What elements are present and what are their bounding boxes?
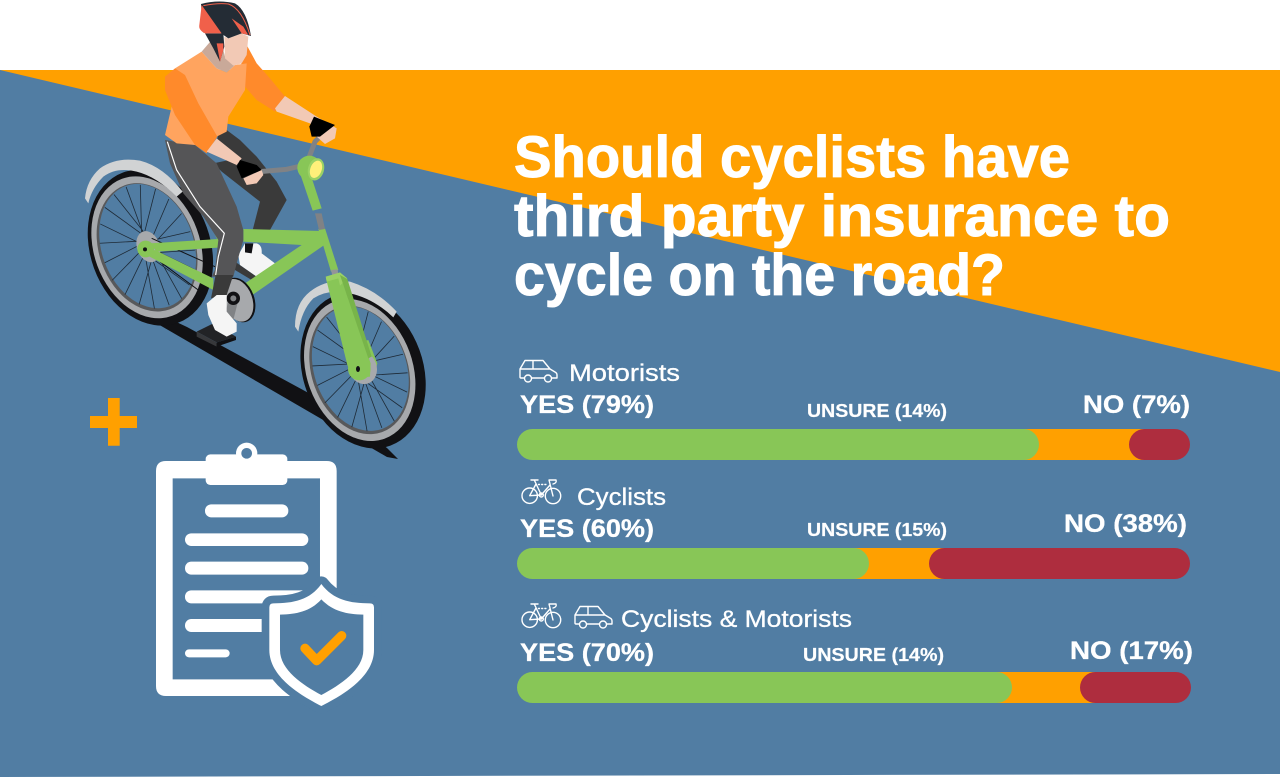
head tube xyxy=(318,228,338,272)
helmet red stripe xyxy=(203,4,250,35)
handlebars xyxy=(260,137,320,172)
near forearm xyxy=(207,138,242,165)
helmet xyxy=(201,1,251,38)
unsure value: UNSURE (14%) xyxy=(807,401,947,421)
icon: bicycle xyxy=(522,604,561,628)
clip xyxy=(206,443,287,485)
near shoe xyxy=(207,295,237,337)
stacked bar xyxy=(517,429,1190,460)
unsure value: UNSURE (15%) xyxy=(807,520,947,540)
rear wheel xyxy=(67,152,234,343)
rear stays xyxy=(150,239,218,252)
chainring xyxy=(216,273,261,327)
rear fender xyxy=(85,160,183,203)
leg stripe xyxy=(167,142,224,275)
chart row: cyclists and motorists xyxy=(517,604,1193,703)
label: cyclists and motorists: Cyclists & Motorists xyxy=(621,606,852,633)
illustration: cyclist on a bike xyxy=(67,1,447,466)
label: cyclists: Cyclists xyxy=(577,484,666,511)
chart row: motorists xyxy=(517,360,1190,460)
neck xyxy=(202,40,235,73)
no value: NO (38%) xyxy=(1064,510,1187,538)
upper head tube xyxy=(300,171,322,211)
text lines xyxy=(185,504,308,657)
near glove xyxy=(237,160,262,178)
shield xyxy=(269,584,374,706)
helmet red side xyxy=(199,5,222,33)
seat tube xyxy=(211,223,225,245)
stacked bar xyxy=(517,548,1190,579)
stem xyxy=(315,213,325,230)
front fender xyxy=(295,281,397,332)
chain xyxy=(152,238,215,295)
front wheel xyxy=(279,275,447,466)
label: motorists: Motorists xyxy=(569,360,680,387)
pedal xyxy=(197,323,236,347)
near shin xyxy=(211,275,233,298)
near arm xyxy=(165,68,217,153)
title: third party insurance to xyxy=(514,184,1170,249)
drivetrain and frame xyxy=(132,223,338,347)
helmet strap xyxy=(205,33,224,62)
headlamp xyxy=(297,156,327,182)
icon: clipboard with shield xyxy=(156,443,374,706)
far shoe xyxy=(235,243,275,280)
icon: bicycle xyxy=(522,480,561,504)
near leg xyxy=(165,140,243,277)
chart row: cyclists xyxy=(517,480,1190,579)
title xyxy=(514,125,1170,308)
rear hub xyxy=(137,241,154,257)
stacked bar xyxy=(517,672,1191,703)
face xyxy=(224,33,248,66)
helmet red wedge xyxy=(232,18,248,35)
top tube and down tube xyxy=(243,229,327,295)
yes value: YES (70%) xyxy=(520,639,654,667)
icon: car xyxy=(520,360,557,382)
unsure value: UNSURE (14%) xyxy=(803,645,944,665)
title: cycle on the road? xyxy=(514,243,1005,308)
rear cassette xyxy=(132,228,164,266)
clipboard board xyxy=(156,461,337,696)
front fork xyxy=(326,272,382,388)
title: Should cyclists have xyxy=(514,125,1070,190)
icon: car xyxy=(575,606,612,628)
far forearm and hand xyxy=(275,96,337,144)
road shadow xyxy=(113,294,398,459)
yes value: YES (60%) xyxy=(520,515,654,543)
far arm xyxy=(240,45,285,112)
far glove xyxy=(309,117,335,137)
far leg xyxy=(213,130,287,230)
no value: NO (17%) xyxy=(1070,637,1193,665)
torso xyxy=(165,52,247,145)
background: orange band xyxy=(0,70,1280,380)
check mark xyxy=(305,636,342,661)
no value: NO (7%) xyxy=(1083,391,1190,419)
yes value: YES (79%) xyxy=(520,391,654,419)
near hand xyxy=(243,170,263,185)
head xyxy=(199,1,251,73)
icon: plus sign xyxy=(90,398,137,446)
